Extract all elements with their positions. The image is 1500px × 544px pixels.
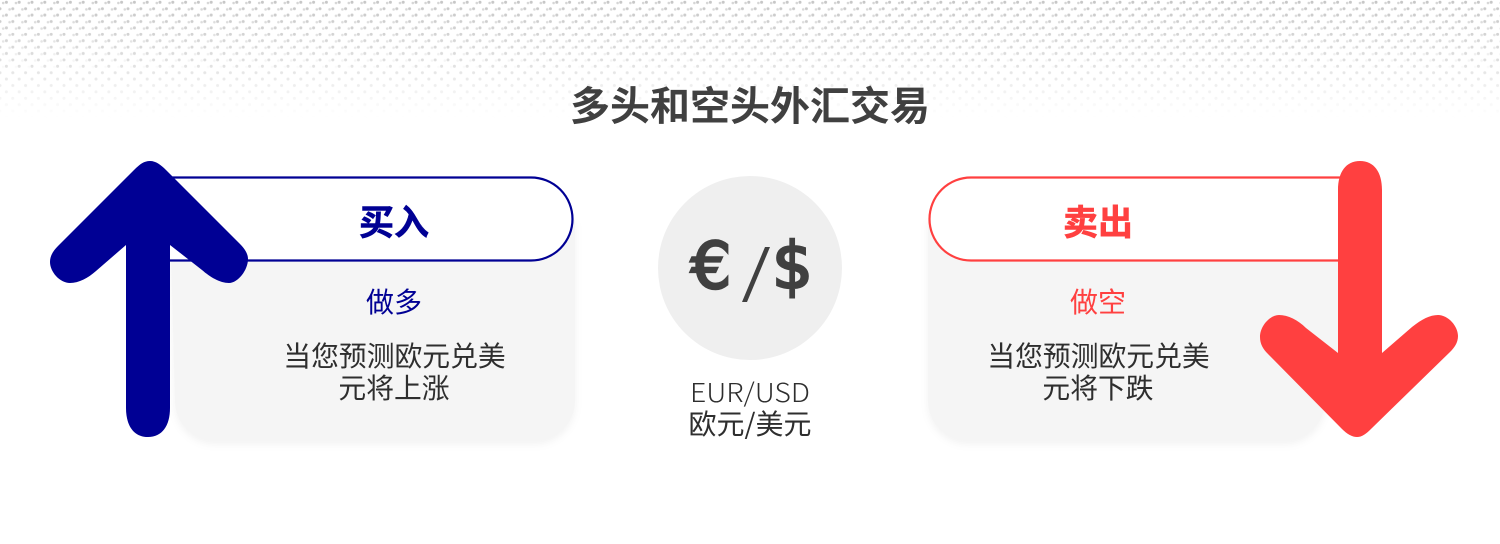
- icon: up arrow: [50, 161, 248, 437]
- icon: euro over dollar symbols: [691, 230, 813, 304]
- buy pill header: [165, 178, 572, 260]
- panel: sell: [928, 161, 1458, 441]
- sell label: 卖出: [1063, 204, 1133, 243]
- sell description: 元将下跌: [1042, 373, 1154, 404]
- short label: 做空: [1070, 287, 1126, 318]
- currency circle: [658, 176, 842, 360]
- panel: currency pair: [658, 176, 842, 443]
- buy label: 买入: [359, 204, 429, 243]
- sell description: [987, 341, 1210, 404]
- buy description: [283, 341, 506, 404]
- sell description: 当您预测欧元兑美: [987, 341, 1210, 372]
- pair label: EUR/USD: [690, 373, 810, 410]
- buy description: 元将上涨: [338, 373, 450, 404]
- long label: 做多: [366, 287, 422, 318]
- buy card background: [170, 220, 575, 441]
- title: 多头和空头外汇交易: [570, 85, 930, 129]
- buy description: 当您预测欧元兑美: [283, 341, 506, 372]
- sell card background: [928, 220, 1345, 441]
- icon: down arrow: [1260, 161, 1458, 437]
- icon: euro over dollar symbols: €: [691, 230, 731, 304]
- panel: buy: [50, 161, 575, 441]
- pair label: [689, 373, 811, 443]
- pair label: 欧元/美元: [689, 403, 811, 443]
- icon: euro over dollar symbols: $: [772, 230, 813, 304]
- sell pill header: [929, 178, 1345, 260]
